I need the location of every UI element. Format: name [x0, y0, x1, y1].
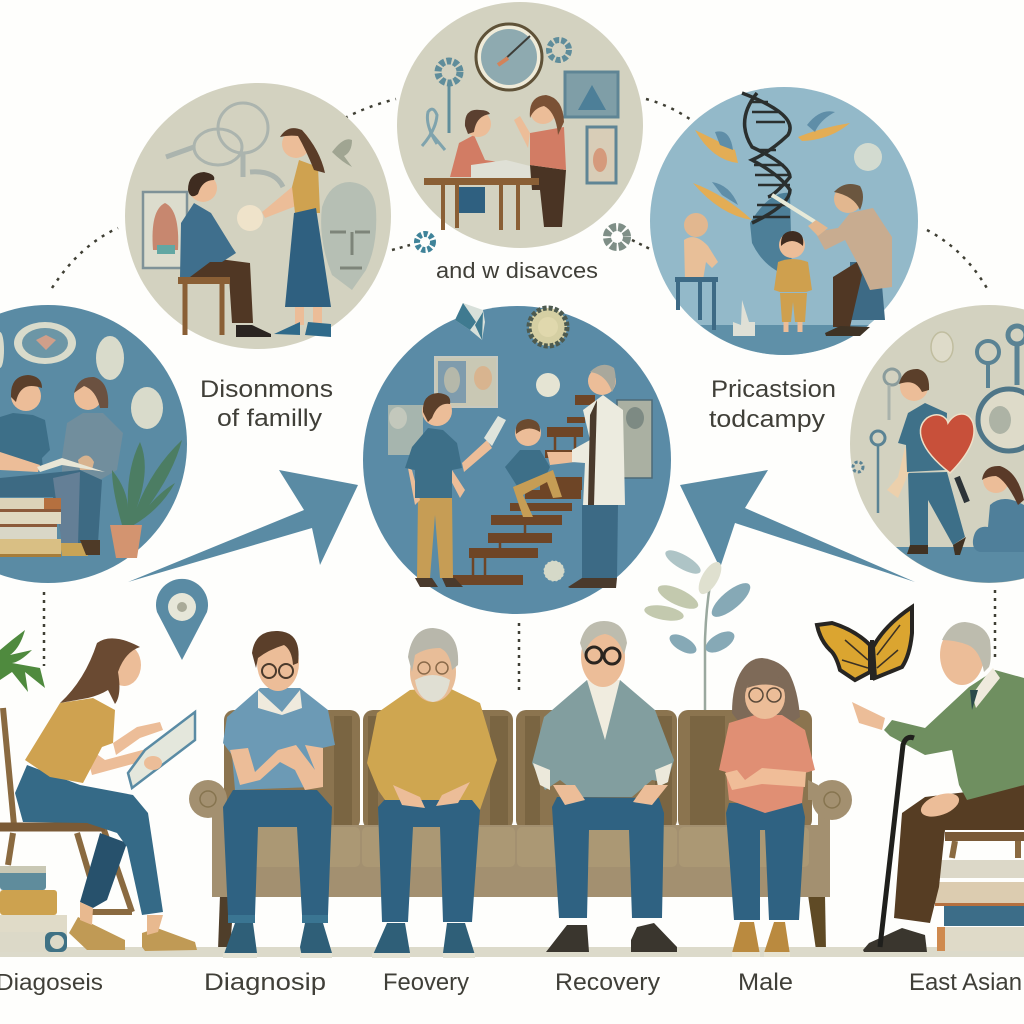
round wall icon [854, 143, 882, 171]
person: man in yellow shirt [367, 628, 497, 958]
torso [25, 698, 115, 783]
shoes [69, 917, 197, 951]
frames on wall [565, 72, 618, 183]
DNA helix [742, 93, 792, 277]
dotted connector: top-left to top-center circle [345, 99, 396, 118]
icon: small gear right [607, 227, 627, 247]
leaf [332, 139, 352, 167]
framed portrait [143, 192, 187, 268]
legs [894, 785, 1024, 923]
upper arm [113, 722, 163, 755]
dotted connector: lower right [994, 590, 996, 657]
arrow: right pointing to center [680, 470, 915, 582]
child on chair [675, 213, 718, 330]
panel: couch [189, 710, 852, 950]
icon: small gear left [417, 234, 433, 250]
caption: center top: and w disavces [436, 258, 598, 283]
stool [945, 832, 1024, 858]
dotted connector: lower center [518, 623, 520, 693]
brown staircase [453, 395, 595, 585]
heading: left label: of familly [217, 405, 322, 432]
heading: left label: Disonmons [200, 376, 333, 403]
table [424, 178, 539, 230]
person: man in blue polo [223, 631, 335, 958]
label: bottom row: Recovery [555, 969, 660, 996]
hand [852, 702, 885, 730]
icon: butterfly [817, 607, 912, 680]
icon: wall clock [476, 24, 542, 90]
small cone icon [733, 300, 755, 336]
person: standing woman [262, 128, 331, 337]
person: left man [405, 393, 506, 587]
head and hair [107, 644, 141, 686]
lower arm [84, 745, 165, 775]
heading: right label: todcampy [709, 406, 825, 433]
person: sitting girl [973, 466, 1024, 552]
body front [212, 825, 830, 897]
small burst [544, 561, 564, 581]
thought bubbles [0, 322, 163, 429]
bird: lower left [693, 182, 752, 220]
hand [144, 756, 162, 770]
standing boy [774, 231, 812, 332]
professor [772, 184, 892, 336]
heading: right label [709, 376, 836, 433]
icon: magnifier outline [166, 103, 283, 187]
trousers [15, 765, 163, 915]
person: left man [450, 110, 506, 213]
panel: top-center circle [397, 2, 643, 248]
icon: ornate medallion [529, 308, 567, 346]
person: elderly man with cane [852, 622, 1024, 952]
icon: ribbon [422, 109, 445, 150]
books stack [0, 498, 61, 557]
clipboard [128, 712, 195, 788]
cane [880, 737, 914, 947]
icon: red heart [921, 414, 974, 502]
icon: origami shape [455, 303, 485, 340]
label: bottom row: Feovery [383, 969, 469, 996]
label: bottom row: Male [738, 969, 793, 996]
back leg [80, 833, 127, 908]
floor [896, 547, 1024, 583]
icon: location pin [156, 579, 208, 660]
icon: gears [438, 40, 569, 133]
floor line [0, 947, 1024, 957]
books under seat [935, 860, 1024, 951]
arm left [212, 800, 226, 897]
dotted connector: gear left [392, 245, 410, 250]
magnifier icons [853, 326, 1024, 513]
bird: upper right [798, 111, 850, 141]
panel: left circle [0, 305, 187, 583]
person: woman writing on chair [0, 630, 197, 951]
plant: leafy sprig [643, 546, 755, 710]
panel: center circle [363, 306, 671, 614]
legs [218, 895, 234, 950]
shoe [863, 928, 927, 952]
potted plant [110, 440, 182, 558]
person: right woman [514, 95, 566, 227]
stone face [321, 182, 376, 290]
back cushions [224, 710, 360, 830]
label: bottom row: East Asian [909, 969, 1022, 996]
dotted connector: top-center to top-right circle [646, 99, 694, 122]
person: man in gray cardigan [532, 621, 677, 952]
label: bottom row: Diagnosip [204, 969, 326, 996]
seat cushions [225, 827, 809, 867]
person: right woman [62, 377, 123, 480]
panel: right circle [850, 305, 1024, 583]
panel: top-left circle [125, 83, 391, 349]
paper on table [471, 160, 530, 178]
plant [0, 630, 45, 692]
dotted connector: gear right [632, 240, 652, 250]
dotted connector: lower left [43, 592, 45, 666]
dotted connector: top-right to right circle [927, 230, 988, 290]
panel: top-right circle [650, 87, 918, 355]
head [940, 625, 984, 685]
heading: right label: Pricastsion [711, 376, 836, 403]
dotted connector: left to top-left circle [52, 228, 118, 288]
person: doctor [547, 365, 625, 588]
person: seated man [178, 172, 271, 337]
arm right [808, 780, 830, 897]
person: left man [0, 375, 105, 556]
bird: upper left [695, 130, 738, 163]
person: woman in coral shirt [719, 658, 815, 957]
person: seated boy [505, 419, 562, 517]
heading: left label [200, 376, 333, 432]
person: man in blue [887, 369, 966, 555]
chair [0, 708, 132, 912]
hand object [237, 205, 263, 231]
books: lower left stack [0, 866, 67, 952]
arrow: left pointing to center [128, 470, 358, 582]
label: bottom row [0, 969, 1022, 996]
torso [884, 670, 1024, 800]
floor [700, 325, 869, 355]
wall frames [388, 357, 652, 478]
